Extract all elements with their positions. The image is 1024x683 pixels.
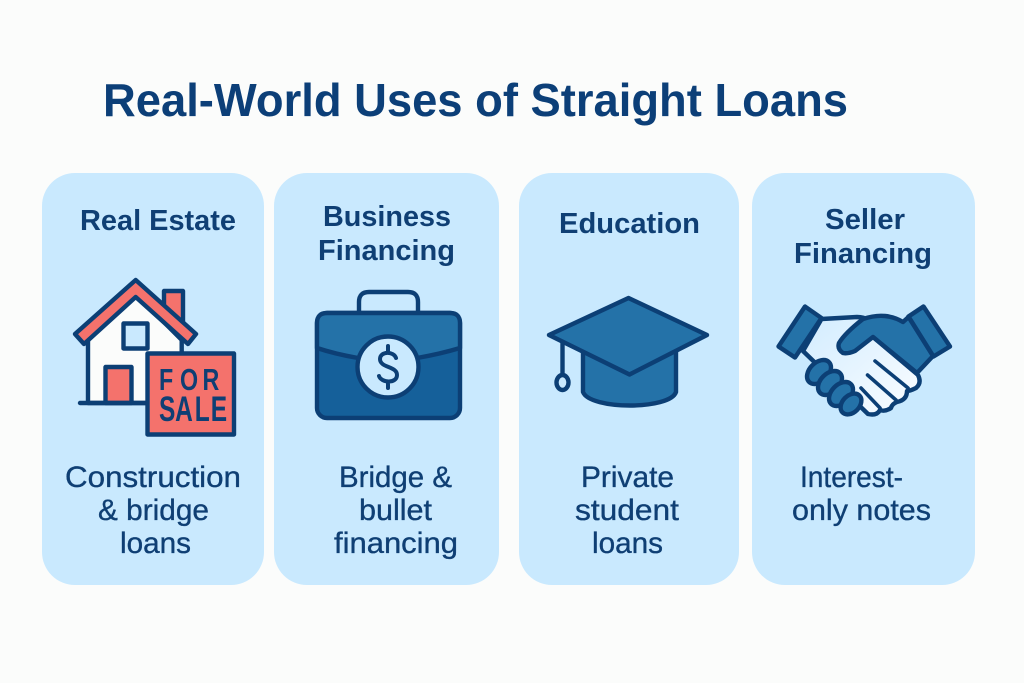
heading: real estate: Real Estate [80,205,236,237]
panel: seller financing [752,173,975,585]
description: bridge and bullet financing: bullet [359,494,433,527]
heading: seller financing: Seller [825,204,905,236]
description: private student loans: student [575,494,680,527]
description: bridge and bullet financing [334,461,458,560]
icon text: for sale: FOR [159,362,219,397]
description: bridge and bullet financing: Bridge & [339,461,452,494]
heading: business financing [318,201,455,267]
description: bridge and bullet financing: financing [334,527,458,560]
icon: graduation cap [549,298,707,406]
description: interest-only notes [792,461,931,527]
icon text: for sale: SALE [159,391,227,429]
heading: business financing: Business [323,201,451,233]
heading: business financing: Financing [318,235,455,267]
description: construction and bridge loans [65,461,241,560]
title: Real-World Uses of Straight Loans [103,74,848,126]
heading: seller financing: Financing [794,238,932,270]
description: interest-only notes: Interest- [800,461,903,494]
description: private student loans [575,461,680,560]
description: private student loans: Private [581,461,674,494]
icon text: for sale [159,362,227,429]
icon: briefcase with dollar [317,292,460,418]
description: private student loans: loans [592,527,663,560]
icon: handshake [778,306,950,418]
icon: house with for sale sign [75,280,234,434]
description: interest-only notes: only notes [792,494,931,527]
heading: education: Education [559,208,700,240]
panel: real estate [42,173,264,585]
heading: seller financing [794,204,932,270]
panel: business financing [274,173,499,585]
panel: education [519,173,739,585]
description: construction and bridge loans: & bridge [98,494,209,527]
description: construction and bridge loans: loans [120,527,191,560]
description: construction and bridge loans: Construction [65,461,241,494]
